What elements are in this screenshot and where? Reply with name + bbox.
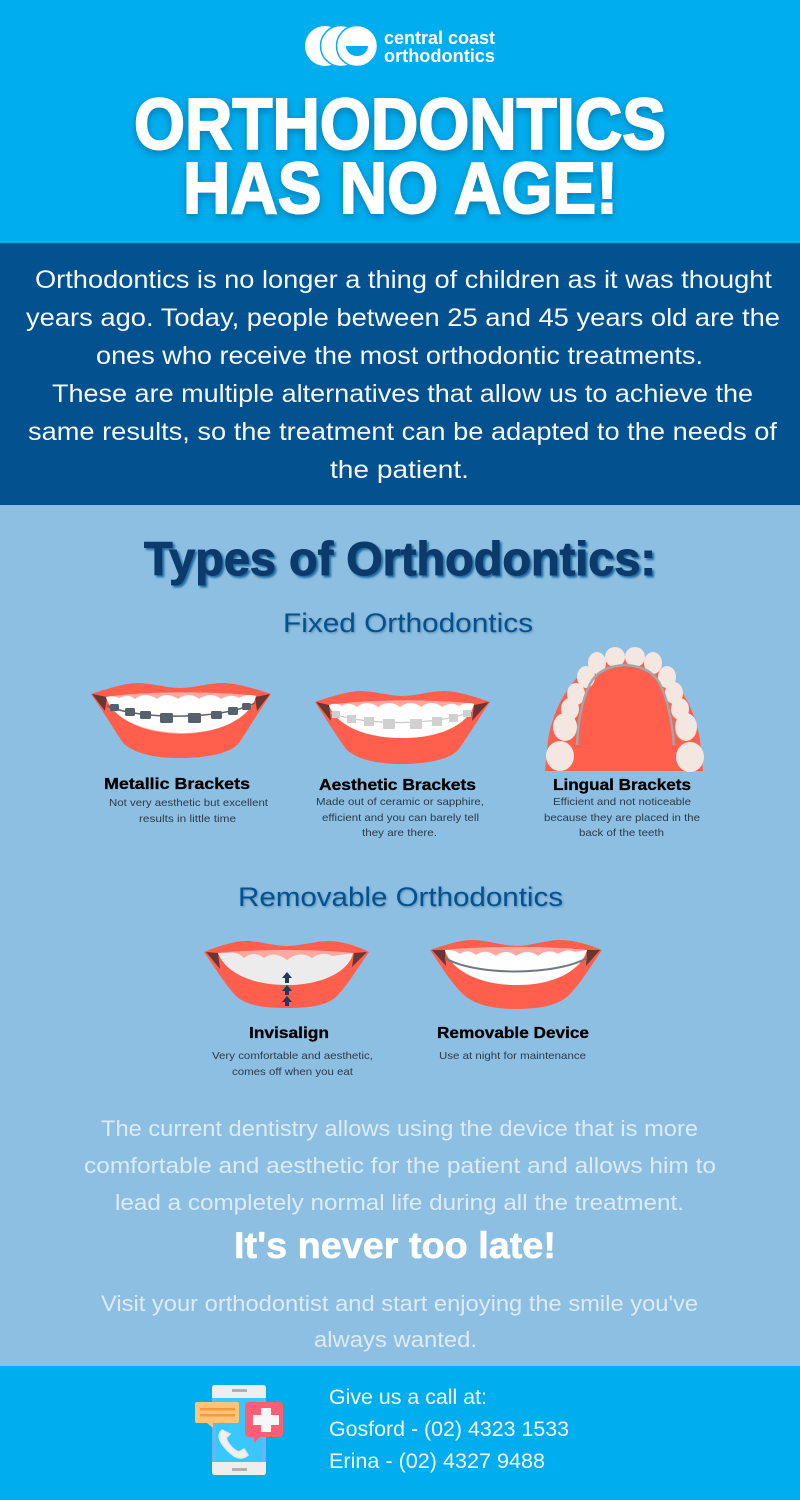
panel: introduction: These are multiple alternatives that allow us to achieve the: [52, 380, 753, 408]
text block: visit your orthodontist: always wanted.: [314, 1327, 477, 1352]
logo: [305, 26, 495, 66]
card: metallic brackets: Not very aesthetic but excellent: [109, 797, 268, 809]
heading: it's never too late: It's never too late!: [234, 1225, 556, 1266]
card: invisalign: Very comfortable and aesthetic,: [212, 1050, 373, 1062]
card: invisalign: comes off when you eat: [232, 1066, 353, 1078]
panel: introduction: the patient.: [330, 456, 469, 484]
card: lingual brackets: Lingual Brackets: [553, 777, 691, 794]
card: lingual brackets: Efficient and not noticeable: [553, 796, 691, 808]
text block: current dentistry: The current dentistry allows using the device that is more: [101, 1116, 698, 1141]
card: lingual brackets: back of the teeth: [579, 827, 664, 839]
text block: visit your orthodontist: Visit your orthodontist and start enjoying the smile you've: [101, 1291, 698, 1316]
card: aesthetic brackets: they are there.: [362, 827, 437, 839]
card: metallic brackets: [91, 683, 271, 825]
title: ORTHODONTICS: [134, 85, 666, 165]
panel: introduction: same results, so the treatment can be adapted to the needs of: [28, 418, 777, 446]
panel: introduction: ones who receive the most orthodontic treatments.: [96, 342, 703, 370]
text block: visit your orthodontist: [101, 1291, 698, 1352]
icon: metallic brackets smile: [91, 683, 271, 758]
logo: central coast: [384, 28, 495, 48]
contact details: Gosford - (02) 4323 1533: [329, 1418, 569, 1441]
icon: lingual arch: [545, 647, 704, 772]
icon: invisalign smile: [204, 941, 369, 1008]
text block: current dentistry: comfortable and aesthetic for the patient and allows him to: [84, 1153, 716, 1178]
card: aesthetic brackets: [315, 691, 490, 839]
heading: types of orthodontics: Types of Orthodontics:: [144, 532, 656, 585]
heading: removable orthodontics: Removable Orthodontics: [238, 882, 563, 912]
title: [134, 85, 666, 229]
card: aesthetic brackets: efficient and you can barely tell: [322, 812, 479, 824]
card: metallic brackets: Metallic Brackets: [104, 776, 250, 793]
card: removable device: Use at night for maintenance: [439, 1050, 586, 1062]
heading: fixed orthodontics: Fixed Orthodontics: [283, 608, 533, 638]
panel: header: [0, 0, 800, 243]
contact details: Erina - (02) 4327 9488: [329, 1450, 545, 1473]
title: HAS NO AGE!: [183, 149, 618, 229]
card: lingual brackets: because they are placed in the: [544, 812, 700, 824]
contact details: Give us a call at:: [329, 1386, 487, 1409]
card: lingual brackets: [544, 647, 704, 839]
card: invisalign: Invisalign: [249, 1025, 329, 1042]
text block: current dentistry: lead a completely normal life during all the treatment.: [115, 1190, 684, 1215]
logo: orthodontics: [384, 46, 495, 66]
contact details: [329, 1386, 569, 1473]
icon: phone with chat and medical cross: [195, 1385, 283, 1475]
panel: introduction: [0, 243, 800, 505]
card: removable device: Removable Device: [437, 1025, 589, 1042]
card: removable device: [430, 940, 602, 1062]
panel: contact footer: [0, 1366, 800, 1500]
card: aesthetic brackets: Aesthetic Brackets: [319, 777, 476, 794]
icon: removable device smile: [430, 940, 602, 1009]
panel: introduction: Orthodontics is no longer a thing of children as it was thought: [35, 266, 772, 294]
card: invisalign: [204, 941, 373, 1078]
icon: aesthetic brackets smile: [315, 691, 490, 764]
card: aesthetic brackets: Made out of ceramic or sapphire,: [316, 796, 484, 808]
panel: introduction: years ago. Today, people between 25 and 45 years old are the: [26, 304, 780, 332]
panel: types background: [0, 505, 800, 1366]
text block: current dentistry: [84, 1116, 716, 1215]
card: metallic brackets: results in little time: [139, 813, 236, 825]
